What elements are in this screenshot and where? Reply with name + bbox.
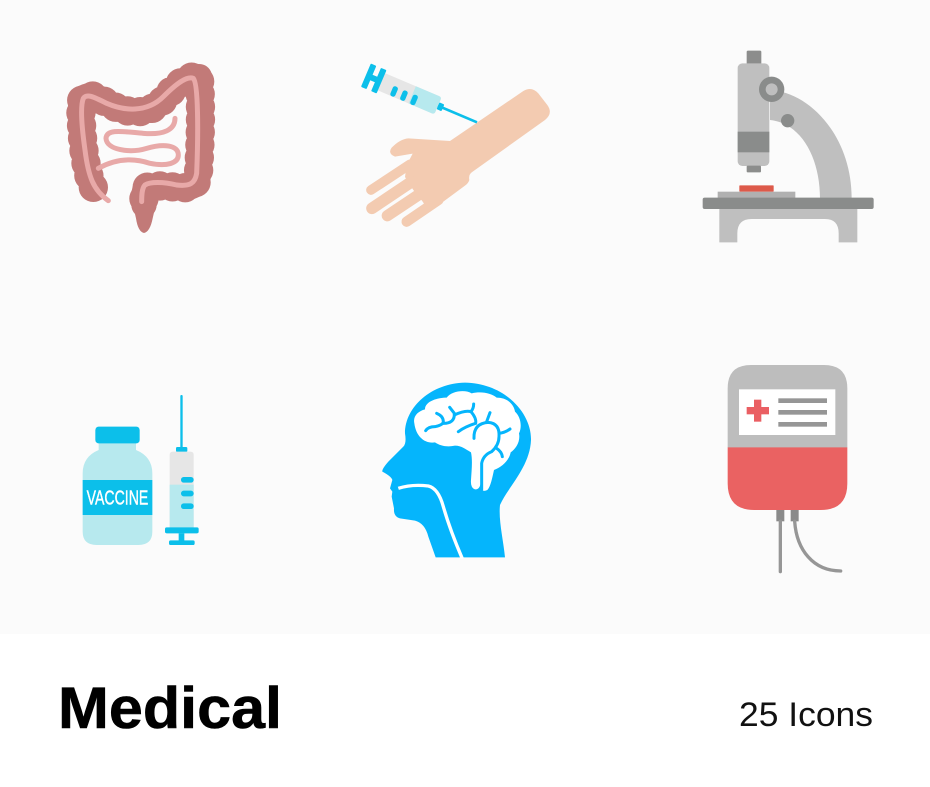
arm and hand: [371, 89, 550, 222]
icon: arm receiving injection: [361, 64, 550, 222]
icon: vaccine bottle and syringe: [83, 395, 199, 545]
title: Medical: [58, 676, 282, 741]
icon count: 25 Icons: [739, 696, 873, 734]
icon: microscope: [703, 51, 874, 242]
vaccine bottle: [83, 427, 152, 545]
icon: head with brain: [382, 383, 531, 559]
icon: intestines: [81, 76, 200, 233]
syringe: [361, 64, 482, 134]
upright syringe: [165, 395, 199, 545]
icon: blood bag: [728, 365, 847, 572]
vaccine bottle: VACCINE: [87, 488, 148, 510]
